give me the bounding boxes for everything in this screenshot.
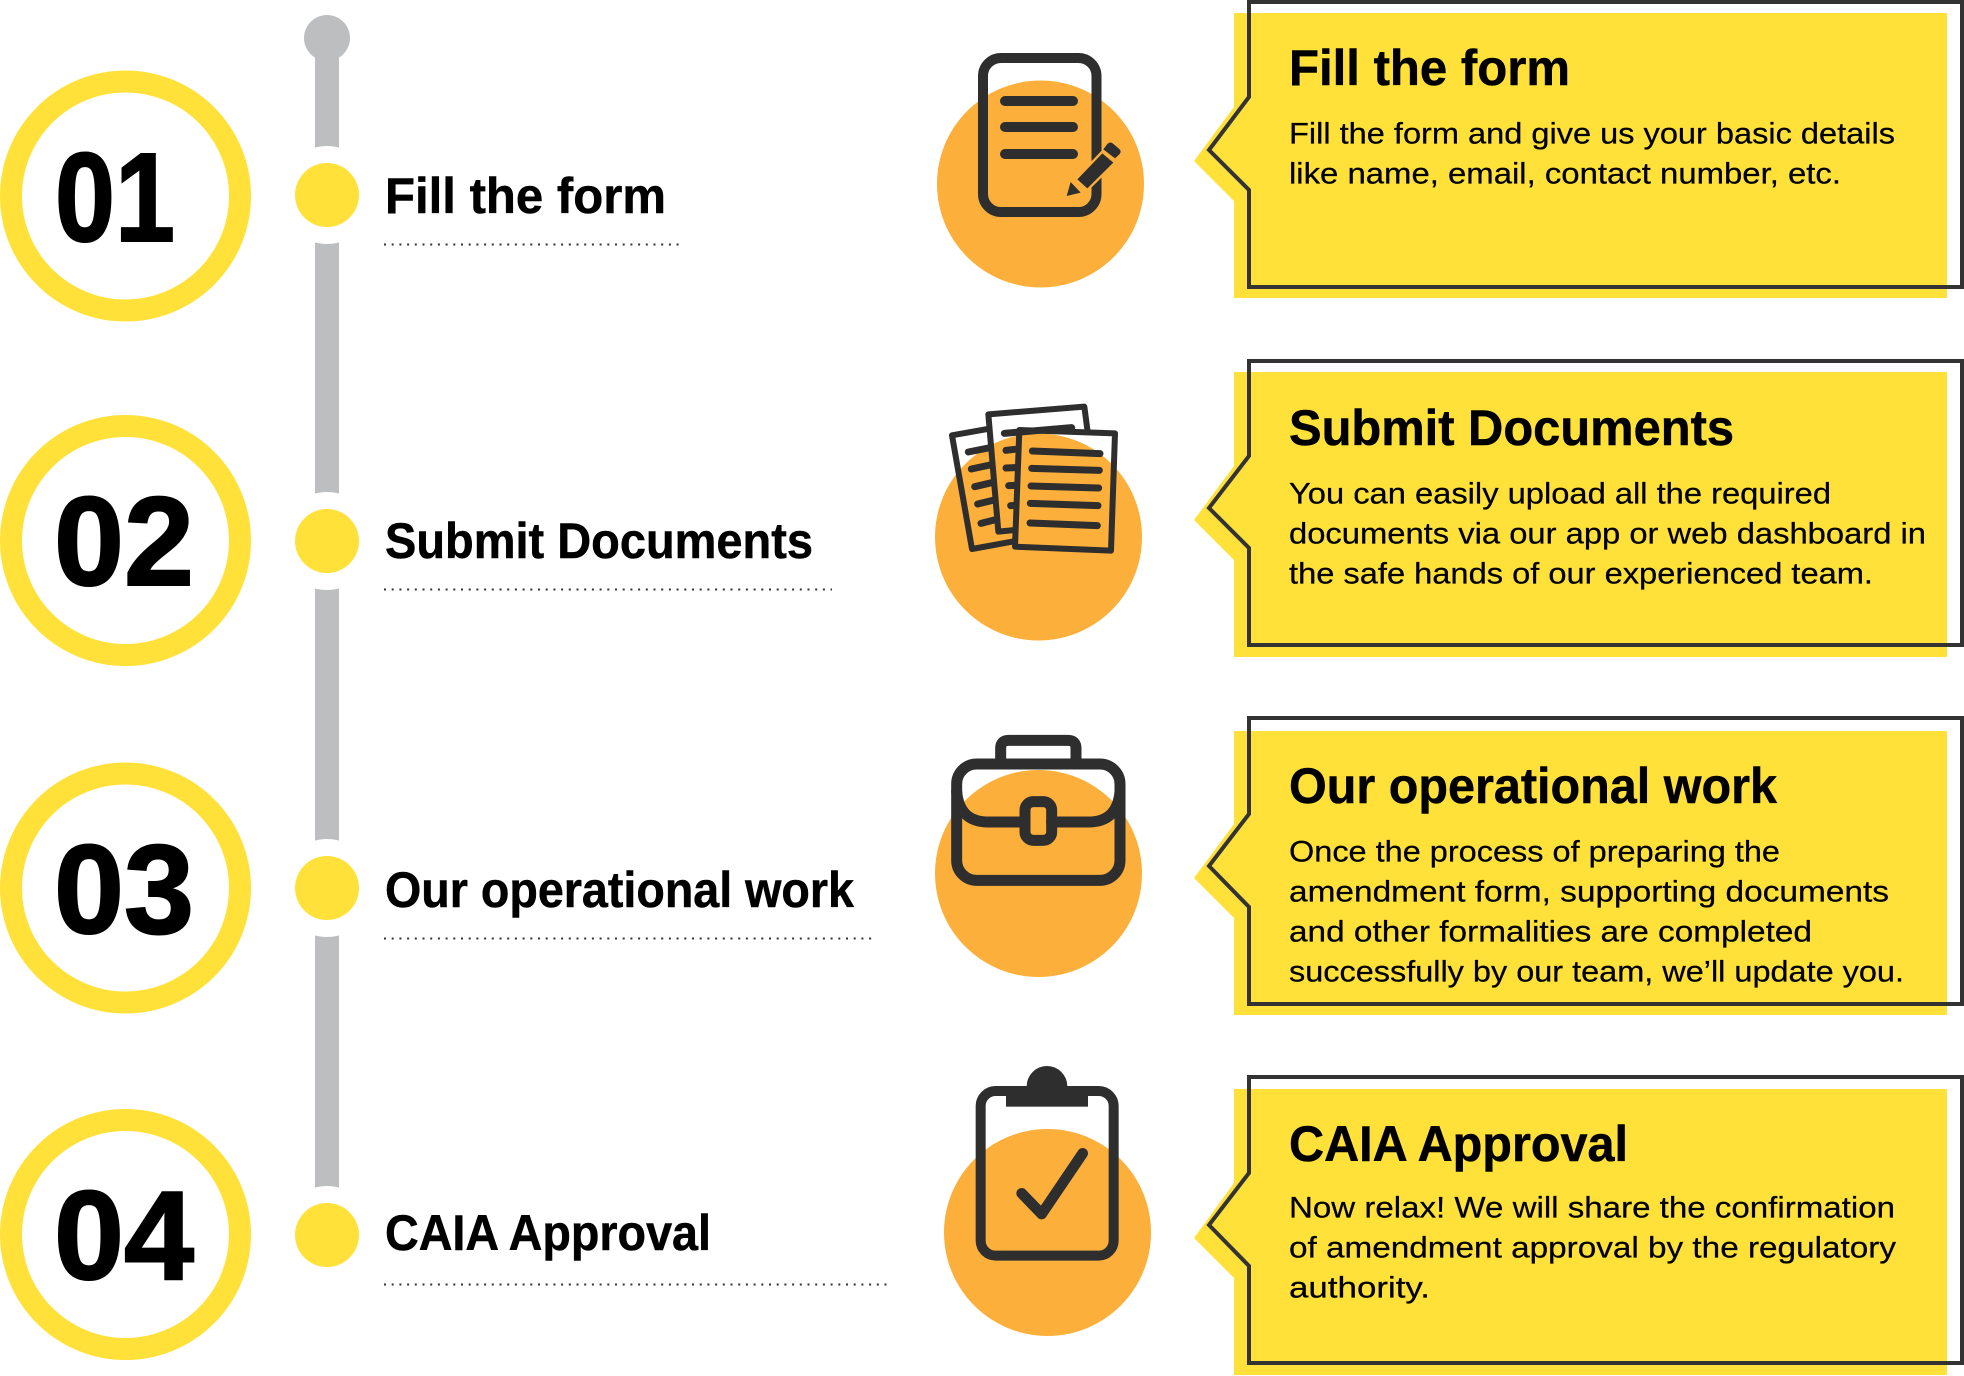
step 03 icon: briefcase <box>935 740 1142 977</box>
step 04 label: CAIA Approval <box>385 1205 711 1261</box>
step 03 number badge: 03 <box>54 819 194 960</box>
panel: our operational work: successfully by our team, we’ll update you. <box>1289 956 1904 988</box>
panel: submit documents: You can easily upload all the required <box>1289 478 1831 510</box>
step 02 number badge: 02 <box>54 471 194 612</box>
panel: fill the form: Fill the form and give us your basic details <box>1289 118 1895 150</box>
panel: submit documents <box>1194 361 1962 657</box>
panel: caia approval: CAIA Approval <box>1289 1116 1628 1172</box>
panel: caia approval <box>1194 1077 1962 1375</box>
step 02 number badge <box>11 426 240 655</box>
step 02 icon: documents <box>935 407 1142 640</box>
step 01 number badge <box>11 82 240 310</box>
panel: caia approval: Now relax! We will share the confirmation <box>1289 1192 1895 1224</box>
step 03 number badge <box>11 774 240 1002</box>
step 01 label: Fill the form <box>385 168 666 224</box>
panel: our operational work: and other formalities are completed <box>1289 916 1812 948</box>
step 04 icon: clipboard with check <box>944 1066 1151 1336</box>
step 04 number badge: 04 <box>54 1165 194 1306</box>
panel: our operational work: Once the process of preparing the <box>1289 836 1780 868</box>
panel: our operational work: Our operational work <box>1289 758 1777 814</box>
panel: submit documents: documents via our app or web dashboard in <box>1289 518 1926 550</box>
panel: submit documents: Submit Documents <box>1289 400 1734 456</box>
panel: fill the form <box>1194 2 1962 298</box>
panel: fill the form: like name, email, contact number, etc. <box>1289 158 1841 190</box>
step 01 number badge: 01 <box>55 127 175 268</box>
timeline: vertical grey bar with dots <box>278 15 376 1284</box>
panel: caia approval: authority. <box>1289 1272 1430 1304</box>
panel: our operational work <box>1194 718 1962 1015</box>
step 02 label: Submit Documents <box>385 513 813 569</box>
step 01 icon: form with pencil <box>937 58 1144 288</box>
panel: caia approval: of amendment approval by the regulatory <box>1289 1232 1896 1264</box>
panel: submit documents: the safe hands of our experienced team. <box>1289 558 1873 590</box>
step 03 label: Our operational work <box>385 862 854 918</box>
panel: fill the form: Fill the form <box>1289 40 1570 96</box>
panel: our operational work: amendment form, supporting documents <box>1289 876 1889 908</box>
step 04 number badge <box>11 1120 240 1349</box>
